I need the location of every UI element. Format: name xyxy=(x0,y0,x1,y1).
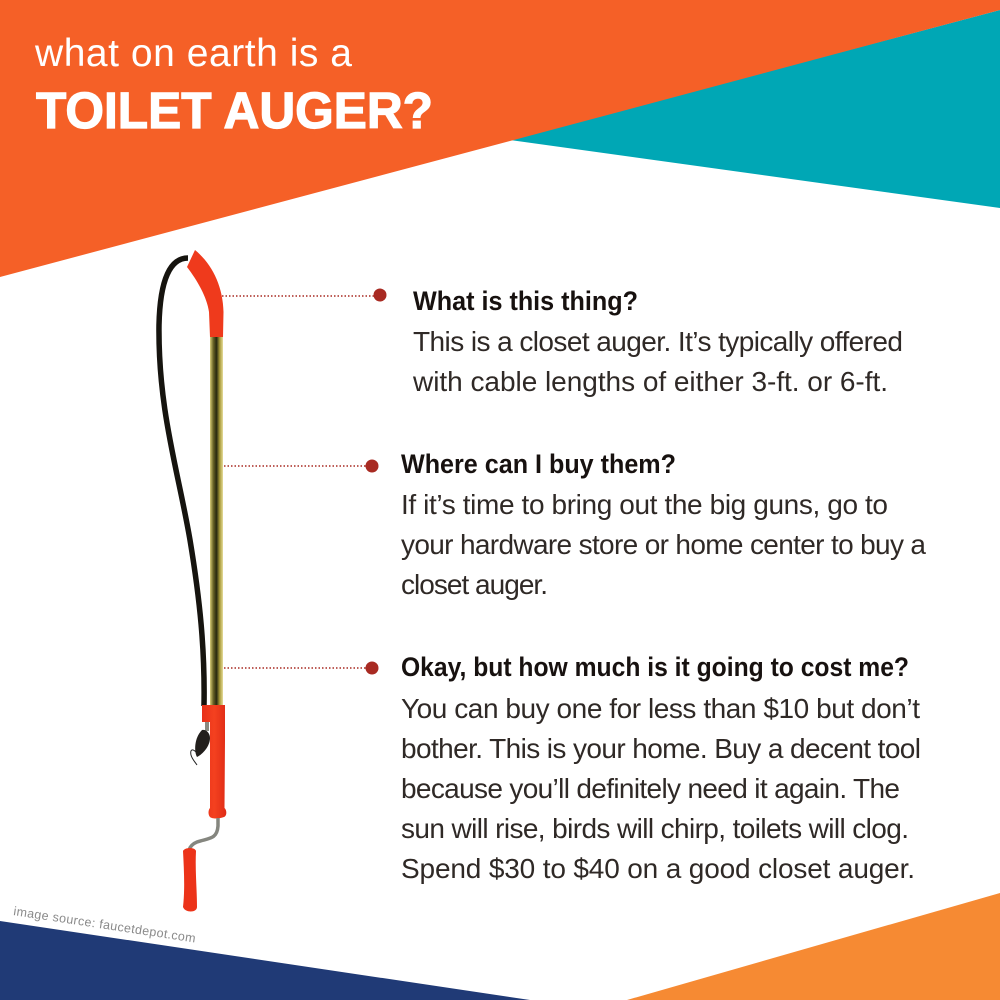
leader line 1 xyxy=(222,288,386,302)
title: what on earth is a xyxy=(34,32,352,75)
orange banner xyxy=(0,0,1000,277)
text block: how much will it cost: Spend $30 to $40 on a good closet auger. xyxy=(401,853,915,884)
auger cable xyxy=(159,258,204,706)
text block: what is this thing: What is this thing? xyxy=(413,286,638,316)
text block: how much will it cost: because you’ll definitely need it again. The xyxy=(401,773,900,804)
spring coil xyxy=(195,730,210,757)
text block: how much will it cost: sun will rise, birds will chirp, toilets will clog. xyxy=(401,813,909,844)
text block: where can I buy them: Where can I buy them? xyxy=(401,449,676,479)
text block: where can I buy them: closet auger. xyxy=(401,569,548,600)
red lower grip xyxy=(202,705,226,818)
text block: where can I buy them: your hardware store or home center to buy a xyxy=(401,529,926,560)
navy corner xyxy=(0,921,530,1000)
text block: how much will it cost: You can buy one for less than $10 but don’t xyxy=(401,693,920,724)
text block: where can I buy them xyxy=(401,449,926,600)
text block: how much will it cost: bother. This is your home. Buy a decent tool xyxy=(401,733,921,764)
text block: what is this thing xyxy=(412,286,903,397)
brass shaft xyxy=(210,336,223,708)
metal ferrule xyxy=(205,722,209,731)
crank rod xyxy=(189,818,218,850)
title: TOILET AUGER? xyxy=(36,82,433,139)
curved red top guard xyxy=(187,250,224,337)
image source credit: image source: faucetdepot.com xyxy=(13,904,197,945)
text block: how much will it cost xyxy=(401,652,921,884)
text block: where can I buy them: If it’s time to bring out the big guns, go to xyxy=(401,489,888,520)
text block: what is this thing: This is a closet auger. It’s typically offered xyxy=(413,326,903,357)
title xyxy=(34,32,433,139)
text block: what is this thing: with cable lengths of either 3-ft. or 6-ft. xyxy=(412,366,888,397)
teal banner xyxy=(510,10,1000,208)
leader line 3 xyxy=(224,662,378,674)
orange corner xyxy=(627,893,1000,1000)
leader line 2 xyxy=(224,460,378,472)
icon: toilet auger tool xyxy=(159,250,226,912)
wire tail xyxy=(191,750,197,765)
crank handle xyxy=(183,848,197,912)
text block: how much will it cost: Okay, but how much is it going to cost me? xyxy=(401,652,909,682)
